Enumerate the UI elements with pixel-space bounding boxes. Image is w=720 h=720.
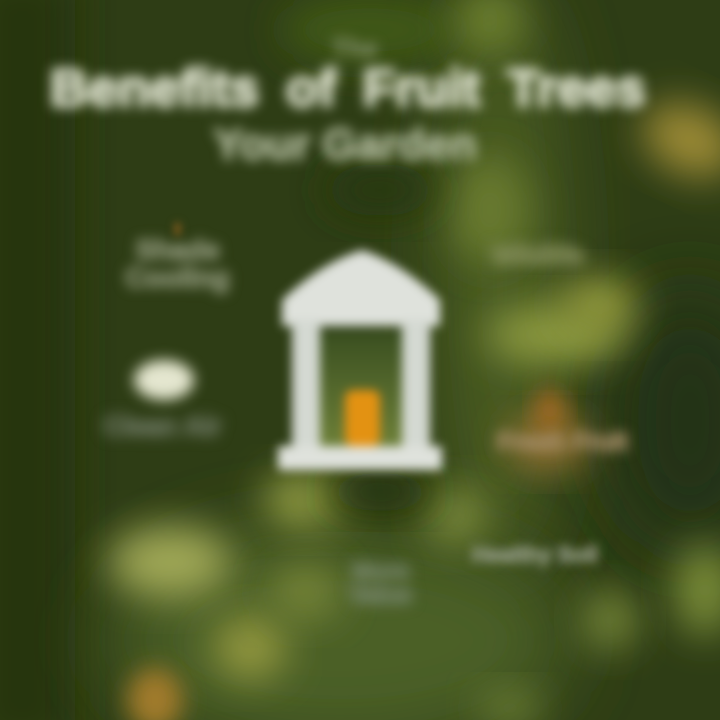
label: lower right: Healthy Soil: [472, 542, 598, 567]
label: upper left: [119, 232, 236, 300]
temple base: [278, 446, 442, 470]
title small top line: The: [332, 33, 378, 63]
label: lower middle: Value: [349, 582, 412, 609]
label: lower middle: More: [352, 558, 409, 585]
title main line: Benefits of Fruit Trees: [50, 59, 646, 118]
temple roof: [282, 250, 440, 326]
title: [42, 32, 653, 169]
label: middle left: Clean Air: [104, 411, 221, 441]
flame: [345, 390, 380, 446]
icon: small orange accent: [174, 222, 181, 236]
title second line: Your Garden: [213, 120, 477, 169]
temple left column: [292, 320, 320, 450]
label: lower middle: [345, 556, 417, 611]
temple right column: [402, 320, 430, 450]
label: upper left: Cooling: [125, 262, 230, 293]
icon: white circle: [134, 360, 194, 400]
temple doorway: [320, 332, 402, 446]
label: orange right: Fresh Fruit: [497, 428, 628, 456]
label: upper left: Shade: [135, 234, 220, 265]
label: upper right: Wildlife: [492, 240, 584, 270]
